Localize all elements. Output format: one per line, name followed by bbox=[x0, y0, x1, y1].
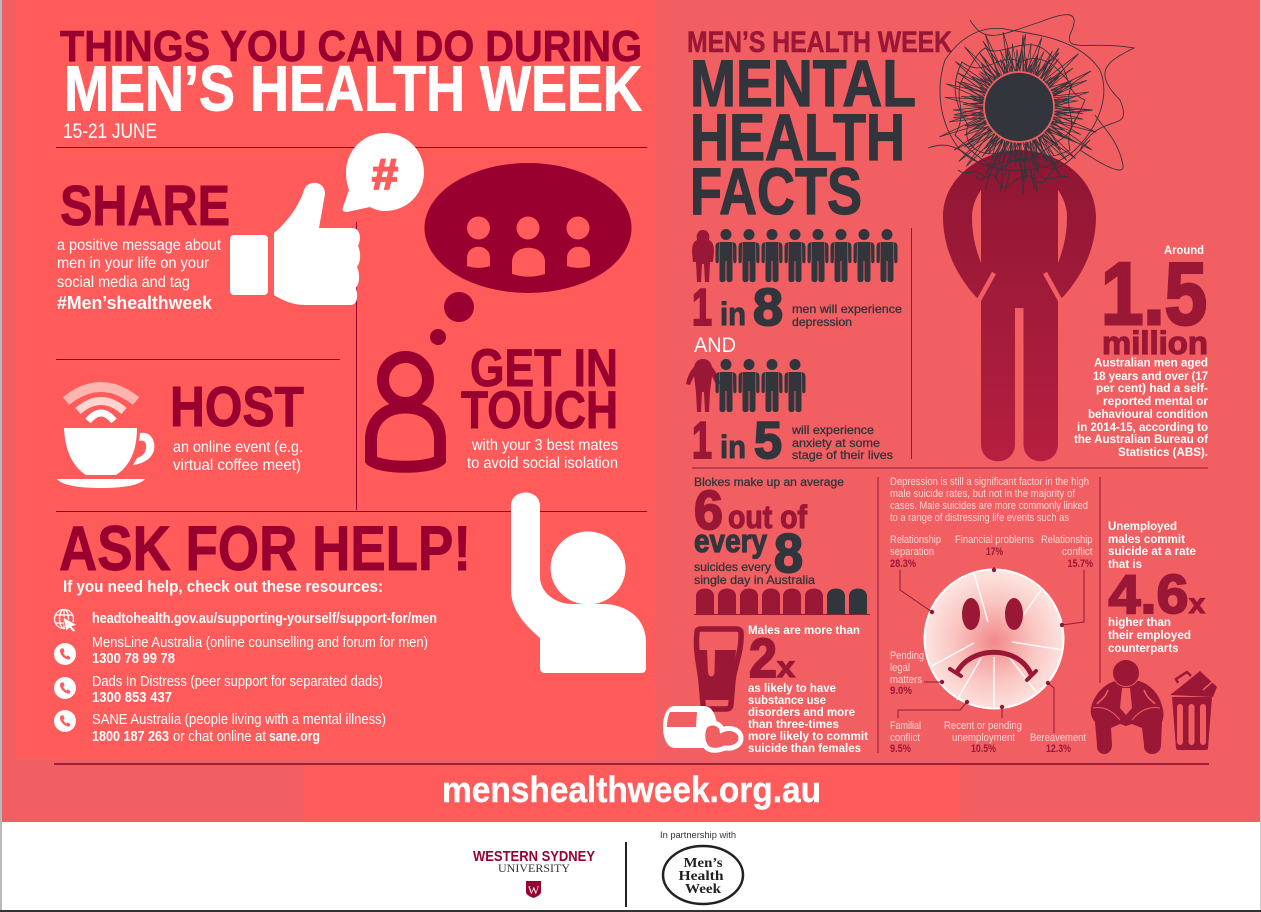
text: australian men: reported mental or bbox=[1103, 394, 1208, 408]
share text block: a positive message about bbox=[57, 237, 221, 254]
heading: ask for help: ASK FOR HELP! bbox=[59, 514, 471, 584]
stat: unemployed 4.6x: Unemployed bbox=[1108, 519, 1177, 533]
stat: unemployed 4.6x: higher than bbox=[1108, 615, 1171, 629]
resource: dads in distress: 1300 853 437 bbox=[92, 689, 172, 706]
host text bbox=[173, 439, 303, 474]
text: australian men: Statistics (ABS). bbox=[1118, 445, 1208, 459]
stat: 1 in 5: 1 bbox=[692, 412, 712, 470]
text: anxiety bbox=[791, 423, 893, 462]
icon: thought bubble with three people bbox=[424, 163, 632, 345]
icon: tombstones bbox=[696, 588, 867, 614]
chart labels: Relationship bbox=[1041, 534, 1092, 546]
stat: unemployed 4.6x: suicide at a rate bbox=[1108, 544, 1196, 558]
icon: hashtag speech bubble bbox=[343, 133, 424, 212]
title: mental health facts: FACTS bbox=[690, 154, 862, 228]
resource: dads in distress: Dads In Distress (peer support for separated dads) bbox=[92, 673, 383, 690]
stat: unemployed 4.6x bbox=[1108, 519, 1205, 655]
text: australian men: per cent) had a self- bbox=[1096, 381, 1208, 395]
heading: host: HOST bbox=[170, 375, 304, 439]
title: mental health facts: HEALTH bbox=[690, 100, 905, 174]
resource: website: headtohealth.gov.au/supporting-yourself/support-for/men bbox=[92, 610, 437, 627]
logo: western sydney university: W bbox=[528, 883, 540, 897]
text: australian men: Australian men aged bbox=[1094, 356, 1208, 370]
heading: get in touch: TOUCH bbox=[461, 381, 618, 440]
text: australian men: the Australian Bureau of bbox=[1074, 432, 1209, 446]
stat: 6 out of every 8: 8 bbox=[774, 522, 803, 584]
heading: share: SHARE bbox=[60, 174, 230, 238]
text: depression paragraph: cases. Male suicides are more commonly linked bbox=[890, 500, 1088, 512]
chart labels: unemployment bbox=[952, 732, 1015, 744]
logo: men's health week: Week bbox=[685, 882, 721, 897]
chart labels: Bereavement bbox=[1030, 732, 1086, 744]
icon: hashtag speech bubble: # bbox=[372, 150, 398, 199]
chart labels: Familial bbox=[890, 720, 921, 732]
icon: person raising hand bbox=[511, 492, 646, 673]
stat: males 2x: Males are more than bbox=[748, 623, 860, 637]
stat: males 2x: 2 bbox=[749, 627, 777, 689]
get in touch text bbox=[467, 437, 618, 472]
chart labels: legal bbox=[890, 662, 910, 674]
icon: phone 3 bbox=[54, 710, 76, 732]
share text block: social media and tag bbox=[57, 274, 190, 291]
title: things you can do: 15-21 JUNE bbox=[63, 120, 157, 143]
chart labels: 9.0% bbox=[890, 685, 912, 697]
logo: men's health week: In partnership with bbox=[660, 830, 736, 840]
stat: males 2x: as likely to have bbox=[748, 681, 836, 695]
icon: outlined person bbox=[371, 357, 440, 467]
icon: 1 in 5 men row bbox=[686, 359, 806, 412]
resource: sane: SANE Australia (people living with a mental illness) bbox=[92, 711, 386, 728]
chart labels: matters bbox=[890, 674, 922, 686]
icon: spilled glass bbox=[663, 706, 741, 750]
stat: unemployed 4.6x: 4.6 bbox=[1108, 563, 1188, 625]
host text: an online event (e.g. bbox=[173, 439, 303, 456]
chart labels: Recent or pending bbox=[944, 720, 1022, 732]
title: mental health facts: MENTAL bbox=[690, 46, 916, 120]
stat: 6 out of every 8: 6 bbox=[694, 479, 723, 541]
chart leader lines bbox=[898, 567, 1084, 733]
resource: sane: sane.org bbox=[269, 728, 320, 745]
text: depression: depression bbox=[792, 315, 852, 329]
stat: 6 out of every 8: out of bbox=[728, 499, 807, 535]
stat: unemployed 4.6x: counterparts bbox=[1108, 641, 1179, 655]
text: australian men: 18 years and over (17 bbox=[1093, 369, 1208, 383]
right dividers bbox=[692, 228, 1208, 753]
chart labels: 28.3% bbox=[890, 558, 916, 570]
icon: phone 2 bbox=[54, 677, 76, 699]
stat: males 2x: than three-times bbox=[748, 717, 839, 731]
icon: globe with cursor bbox=[54, 610, 77, 632]
stat: 1 in 8: 8 bbox=[753, 279, 783, 337]
stat: males 2x: substance use bbox=[748, 693, 826, 707]
logo: western sydney university: UNIVERSITY bbox=[498, 863, 571, 875]
text: australian men: behavioural condition bbox=[1088, 407, 1208, 421]
stat: 1 in 8: in bbox=[720, 296, 746, 332]
share text block: men in your life on your bbox=[57, 255, 210, 272]
stat: 1 in 5: in bbox=[720, 429, 746, 465]
stat: 1 in 5 bbox=[692, 412, 782, 470]
icon: coffee cup with wifi bbox=[57, 387, 154, 488]
stat: 6 out of every 8: every bbox=[694, 523, 767, 559]
stat: 1 in 5: 5 bbox=[754, 412, 782, 470]
stat: unemployed 4.6x: x bbox=[1189, 588, 1205, 619]
logo: western sydney university: WESTERN SYDNEY bbox=[473, 849, 595, 865]
stat: males 2x: suicide than females bbox=[748, 741, 861, 755]
icon: slumped man bbox=[1091, 660, 1164, 754]
text: australian men: in 2014-15, according to bbox=[1077, 420, 1208, 434]
resource: sane bbox=[92, 711, 386, 745]
chart labels: 10.5% bbox=[971, 743, 996, 755]
stat: males 2x bbox=[748, 623, 868, 755]
heading: get in touch: GET IN bbox=[470, 339, 618, 398]
chart labels: Relationship bbox=[890, 534, 941, 546]
stat: males 2x: x bbox=[777, 651, 795, 684]
resource: sane: 1800 187 263 bbox=[92, 728, 169, 745]
icon: trash can with briefcase bbox=[1170, 671, 1217, 750]
footer rule bbox=[54, 763, 1209, 765]
chart labels: Financial problems bbox=[955, 534, 1034, 546]
dividers bbox=[56, 148, 647, 512]
chart labels: separation bbox=[890, 546, 934, 558]
resource: sane: or chat online at bbox=[173, 728, 267, 745]
title: things you can do: THINGS YOU CAN DO DURING bbox=[60, 22, 642, 71]
chart labels: 15.7% bbox=[1068, 558, 1093, 570]
stat: 6 out of every 8: single day in Australia bbox=[694, 573, 815, 587]
share text block bbox=[57, 237, 221, 313]
website address: menshealthweek.org.au bbox=[442, 769, 821, 810]
logo: men's health week bbox=[660, 830, 743, 904]
stat: 1.5 million: million bbox=[1102, 325, 1208, 361]
stat: 6 out of every 8: Blokes make up an average bbox=[694, 475, 844, 489]
title: things you can do bbox=[60, 22, 642, 143]
stat: males 2x: disorders and more bbox=[748, 705, 855, 719]
get in touch text: to avoid social isolation bbox=[467, 455, 618, 472]
logo: men's health week: Men’s bbox=[684, 856, 723, 871]
text: depression: men will experience bbox=[792, 302, 902, 316]
resource: mensline bbox=[92, 634, 428, 667]
logo divider bbox=[625, 842, 627, 907]
text: depression paragraph: male suicide rates, but not in the majority of bbox=[890, 488, 1076, 500]
text: australian men bbox=[1074, 356, 1209, 459]
chart labels: 17% bbox=[986, 546, 1003, 558]
stat: unemployed 4.6x: that is bbox=[1108, 557, 1142, 571]
logo: men's health week: Health bbox=[678, 869, 724, 884]
stat: 1.5 million: 1.5 bbox=[1101, 244, 1207, 343]
logo: western sydney university bbox=[473, 849, 595, 898]
chart labels: conflict bbox=[1062, 546, 1092, 558]
stat: males 2x: more likely to commit bbox=[748, 729, 868, 743]
title: mental health facts bbox=[687, 26, 952, 228]
chart labels: conflict bbox=[890, 732, 920, 744]
text: depression paragraph bbox=[890, 476, 1089, 524]
stat: 6 out of every 8: suicides every bbox=[694, 560, 771, 574]
chart labels bbox=[890, 534, 1093, 755]
title: mental health facts: MEN’S HEALTH WEEK bbox=[687, 26, 952, 59]
text: around: Around bbox=[1164, 245, 1204, 257]
text: depression bbox=[792, 302, 902, 329]
stat: unemployed 4.6x: males commit bbox=[1108, 532, 1185, 546]
text: anxiety: stage of their lives bbox=[792, 448, 893, 462]
icon: phone 1 bbox=[54, 643, 76, 665]
icon: beer glass bbox=[696, 629, 741, 709]
chart labels: 9.5% bbox=[890, 743, 911, 755]
text: and: AND bbox=[694, 334, 736, 357]
chart labels: 12.3% bbox=[1046, 743, 1071, 755]
host text: virtual coffee meet) bbox=[173, 457, 301, 474]
stat: 1 in 8 bbox=[692, 279, 783, 337]
get in touch text: with your 3 best mates bbox=[471, 437, 618, 454]
resource: mensline: MensLine Australia (online counselling and forum for men) bbox=[92, 634, 428, 651]
chart labels: Pending bbox=[890, 650, 924, 662]
resource: mensline: 1300 78 99 78 bbox=[92, 650, 175, 667]
icon: 1 in 8 men row bbox=[692, 229, 898, 282]
heading: get in touch bbox=[461, 339, 618, 440]
icon: thumbs up bbox=[230, 183, 360, 305]
chart: sad face pie bbox=[924, 570, 1064, 708]
title: things you can do: MEN’S HEALTH WEEK bbox=[64, 52, 642, 124]
text: anxiety: anxiety at some bbox=[792, 436, 880, 450]
resource: dads in distress bbox=[92, 673, 383, 706]
stat: 1 in 8: 1 bbox=[692, 279, 712, 337]
text: depression paragraph: to a range of distressing life events such as bbox=[890, 512, 1069, 524]
text: anxiety: will experience bbox=[791, 423, 874, 437]
text: depression paragraph: Depression is still a significant factor in the high bbox=[890, 476, 1089, 488]
share text block: #Men’shealthweek bbox=[57, 293, 213, 313]
stat: 6 out of every 8 bbox=[694, 475, 844, 587]
icon: big man with hands in pockets bbox=[943, 150, 1096, 461]
icon: scribbled head bbox=[928, 15, 1134, 212]
resources intro: If you need help, check out these resources: bbox=[63, 577, 383, 596]
stat: unemployed 4.6x: their employed bbox=[1108, 628, 1191, 642]
